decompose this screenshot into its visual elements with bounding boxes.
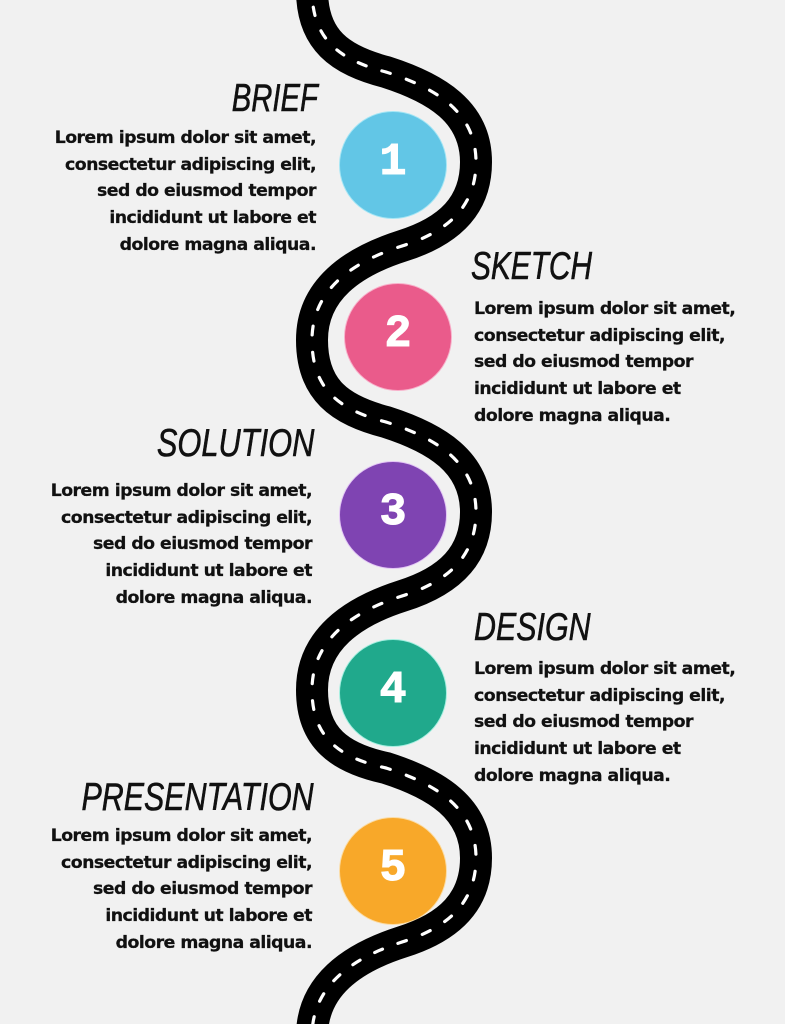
- step 5 circle: [340, 818, 446, 924]
- text: sketch: [474, 299, 735, 426]
- text: presentation: sed do eiusmod tempor: [93, 879, 312, 899]
- text: presentation: consectetur adipiscing elit,: [61, 853, 312, 873]
- heading: presentation: PRESENTATION: [82, 776, 314, 819]
- text: sketch: dolore magna aliqua.: [474, 406, 670, 426]
- step 4 circle: [340, 640, 446, 746]
- text: design: [474, 659, 735, 786]
- text: solution: Lorem ipsum dolor sit amet,: [51, 481, 312, 501]
- text: sketch: sed do eiusmod tempor: [474, 352, 693, 372]
- text: solution: dolore magna aliqua.: [116, 588, 312, 608]
- text: design: Lorem ipsum dolor sit amet,: [474, 659, 735, 679]
- text: brief: dolore magna aliqua.: [120, 235, 316, 255]
- step 2 circle: 2: [384, 309, 412, 360]
- text: solution: consectetur adipiscing elit,: [61, 508, 312, 528]
- step 1 circle: 1: [379, 137, 406, 188]
- step 3 circle: [340, 462, 446, 568]
- text: presentation: incididunt ut labore et: [105, 906, 312, 926]
- text: presentation: Lorem ipsum dolor sit amet,: [51, 826, 312, 846]
- step 1 circle: [340, 112, 446, 218]
- text: design: consectetur adipiscing elit,: [474, 686, 725, 706]
- text: design: incididunt ut labore et: [474, 739, 681, 759]
- heading: brief: BRIEF: [232, 77, 318, 120]
- heading: design: DESIGN: [474, 606, 591, 649]
- text: brief: [55, 128, 317, 255]
- step 3 circle: 3: [379, 487, 406, 538]
- text: solution: sed do eiusmod tempor: [93, 534, 312, 554]
- heading: solution: SOLUTION: [156, 422, 314, 465]
- step 5 circle: 5: [379, 843, 406, 894]
- step 4 circle: 4: [379, 665, 406, 716]
- text: sketch: Lorem ipsum dolor sit amet,: [474, 299, 735, 319]
- step 2 circle: [345, 284, 451, 390]
- text: brief: consectetur adipiscing elit,: [65, 155, 316, 175]
- text: design: dolore magna aliqua.: [474, 766, 670, 786]
- text: presentation: [51, 826, 313, 953]
- text: solution: incididunt ut labore et: [105, 561, 312, 581]
- text: brief: incididunt ut labore et: [109, 208, 316, 228]
- text: brief: Lorem ipsum dolor sit amet,: [55, 128, 316, 148]
- text: presentation: dolore magna aliqua.: [116, 933, 312, 953]
- text: solution: [51, 481, 313, 608]
- text: brief: sed do eiusmod tempor: [97, 181, 316, 201]
- text: sketch: consectetur adipiscing elit,: [474, 326, 725, 346]
- heading: sketch: SKETCH: [471, 245, 592, 288]
- text: design: sed do eiusmod tempor: [474, 712, 693, 732]
- text: sketch: incididunt ut labore et: [474, 379, 681, 399]
